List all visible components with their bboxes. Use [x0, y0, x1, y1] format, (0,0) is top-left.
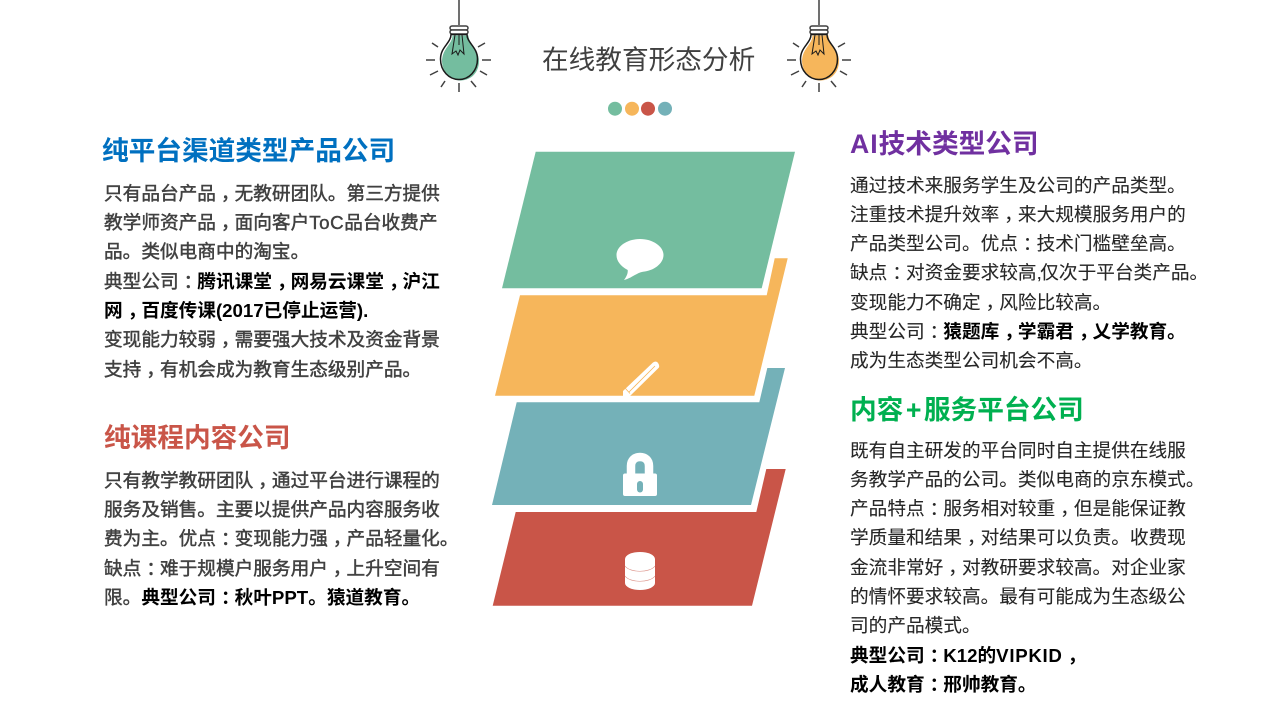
text block: platform channel companies: 教学师资产品 ，面向客户ToC品台收费产	[104, 212, 437, 233]
four coloured dots	[608, 102, 672, 116]
icon: database stack	[625, 552, 655, 590]
title: 在线教育形态分析	[542, 45, 755, 75]
text block: AI technology companies: 成为生态类型公司机会不高。	[850, 350, 1093, 371]
text block: AI technology companies: 产品类型公司。优点 ：技术门槛壁垒高。	[850, 233, 1186, 254]
text block: platform channel companies: 品。类似电商中的淘宝。	[104, 241, 309, 262]
text block: platform channel companies: 支持 ，有机会成为教育生态级别产品。	[104, 359, 421, 380]
text block: AI technology companies: 注重技术提升效率 ，来大规模服务用户的	[850, 204, 1186, 225]
text block: platform channel companies: 只有品台产品 ，无教研团队。第三方提供	[104, 183, 440, 204]
text block: AI technology companies: 典型公司 ：猿题库 ，学霸君 ，乂学教育。	[850, 321, 1186, 342]
heading: content plus service platforms: 内容+服务平台公司	[850, 395, 1084, 425]
panel: teal layer	[492, 368, 785, 505]
icon: padlock	[623, 457, 657, 496]
text block: content plus service platforms: 学质量和结果 ，对结果可以负责。收费现	[850, 527, 1186, 548]
text block: pure course content companies: 只有教学教研团队 ，通过平台进行课程的	[104, 470, 440, 491]
text block: content plus service platforms: 产品特点 ：服务相对较重 ，但是能保证教	[850, 498, 1186, 519]
heading: platform channel companies: 纯平台渠道类型产品公司	[102, 136, 395, 166]
text block: platform channel companies	[104, 183, 440, 380]
text block: platform channel companies: 变现能力较弱 ，需要强大技术及资金背景	[104, 329, 440, 350]
text block: content plus service platforms: 典型公司 ：K12的VIPKID ，	[850, 645, 1086, 666]
text block: content plus service platforms: 既有自主研发的平台同时自主提供在线服	[850, 440, 1186, 460]
text block: content plus service platforms: 的情怀要求较高。最有可能成为生态级公	[850, 586, 1186, 607]
text block: pure course content companies: 费为主。优点 ：变现能力强 ，产品轻量化。	[104, 528, 458, 549]
text block: content plus service platforms: 金流非常好 ，对教研要求较高。对企业家	[850, 557, 1186, 578]
text block: content plus service platforms	[850, 440, 1204, 695]
panel: orange layer	[495, 258, 788, 396]
text block: content plus service platforms: 司的产品模式。	[850, 615, 981, 636]
text block: AI technology companies: 变现能力不确定 ，风险比较高。	[850, 292, 1111, 313]
text block: content plus service platforms: 务教学产品的公司。类似电商的京东模式。	[850, 469, 1204, 490]
text block: content plus service platforms: 成人教育 ：邢帅教育。	[850, 674, 1037, 695]
icon: green light bulb	[426, 0, 491, 92]
heading: AI technology companies: AI技术类型公司	[850, 129, 1039, 159]
icon: pencil	[623, 362, 659, 396]
panel: green layer	[502, 152, 795, 288]
icon: orange light bulb	[787, 0, 851, 92]
text block: platform channel companies: 典型公司 ：腾讯课堂 ，网易云课堂 ，沪江	[104, 271, 440, 292]
text block: pure course content companies: 缺点 ：难于规模户服务用户 ，上升空间有	[104, 558, 440, 579]
text block: pure course content companies: 服务及销售。主要以提供产品内容服务收	[104, 499, 440, 520]
text block: AI technology companies: 缺点 ：对资金要求较高,仅次于平台类产品。	[850, 262, 1208, 283]
text block: pure course content companies	[104, 470, 458, 608]
panel: red layer	[493, 469, 786, 606]
text block: pure course content companies: 限。典型公司 ：秋叶PPT。猿道教育。	[104, 587, 420, 608]
text block: platform channel companies: 网 ，百度传课(2017已停止运营).	[104, 300, 368, 321]
text block: AI technology companies	[850, 174, 1208, 371]
icon: speech bubble	[616, 239, 664, 280]
heading: pure course content companies: 纯课程内容公司	[104, 423, 291, 453]
text block: AI technology companies: 通过技术来服务学生及公司的产品类型。	[850, 174, 1186, 196]
